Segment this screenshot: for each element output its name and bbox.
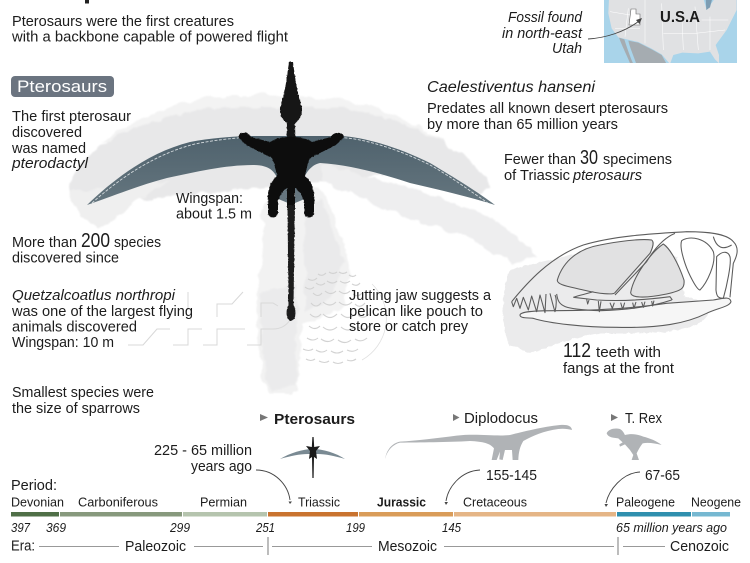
text: fewer than 30 specimens bbox=[504, 147, 672, 184]
lower jaw bbox=[520, 298, 731, 327]
text: fewer than 30 specimens: Fewer than bbox=[504, 152, 576, 168]
Mexico mainland bbox=[628, 41, 667, 65]
period names bbox=[11, 494, 741, 510]
text: teeth bbox=[563, 340, 674, 377]
text: wingspan: about 1.5 m bbox=[176, 206, 252, 222]
rear skull bones bbox=[615, 233, 732, 298]
torso and arms bbox=[238, 133, 344, 218]
period names: Neogene bbox=[691, 494, 741, 510]
text: 200 species: discovered since bbox=[12, 250, 119, 266]
text: Quetzalcoatlus: Wingspan: 10 m bbox=[12, 335, 114, 351]
text: smallest species: Smallest species were bbox=[12, 385, 154, 401]
timeline dates: 397 bbox=[11, 520, 31, 535]
arrow: T. rex to Cretaceous bbox=[604, 472, 640, 507]
skull outline bbox=[512, 232, 737, 302]
period names: Triassic bbox=[298, 494, 340, 510]
text: 200 species bbox=[12, 230, 161, 266]
era row: Mesozoic bbox=[378, 539, 437, 555]
timeline heading: Diplodocus: Diplodocus bbox=[464, 411, 538, 427]
text: wingspan bbox=[176, 191, 252, 222]
timeline heading: Pterosaurs: Pterosaurs bbox=[274, 411, 355, 428]
timeline bar bbox=[11, 512, 730, 516]
text: fossil location: Fossil found bbox=[508, 10, 583, 26]
era row: Cenozoic bbox=[670, 539, 729, 555]
text: 200 species: More than bbox=[12, 235, 77, 251]
text: fewer than 30 specimens: specimens bbox=[603, 152, 672, 168]
subtitle: with a backbone capable of powered flight bbox=[11, 30, 288, 46]
period names: Cretaceous bbox=[463, 494, 527, 510]
period names: Permian bbox=[200, 494, 247, 510]
skull drawing bbox=[512, 232, 737, 327]
text: fewer than 30 specimens: of Triassic bbox=[504, 168, 570, 184]
timeline dates: 145 bbox=[442, 520, 462, 535]
label: 155-145: 155-145 bbox=[486, 468, 537, 484]
text: jutting jaw: pelican like pouch to bbox=[349, 304, 483, 320]
timeline dates: 369 bbox=[46, 520, 66, 535]
tail bbox=[287, 205, 295, 320]
text: first pterosaur: discovered bbox=[12, 125, 82, 141]
text: Quetzalcoatlus bbox=[11, 288, 193, 351]
era row bbox=[11, 537, 729, 555]
timeline dates bbox=[11, 520, 727, 535]
text: teeth: fangs at the front bbox=[563, 361, 674, 377]
text: smallest species: the size of sparrows bbox=[12, 401, 140, 417]
timeline dates: 199 bbox=[346, 520, 365, 535]
text: teeth: 112 bbox=[563, 340, 591, 362]
label: 225-65 million years ago: 225 - 65 million bbox=[154, 443, 252, 459]
pterosaur body group bbox=[238, 62, 344, 320]
text: smallest species bbox=[12, 385, 154, 417]
text: Quetzalcoatlus: animals discovered bbox=[12, 320, 137, 336]
Utah bbox=[629, 9, 640, 25]
text: Caelestiventus hanseni: Predates all known desert pterosaurs bbox=[427, 101, 668, 117]
icon: diplodocus silhouette bbox=[385, 425, 572, 460]
era row: Era: bbox=[11, 538, 35, 554]
period names: Jurassic bbox=[377, 494, 426, 510]
rear opening bbox=[681, 238, 714, 290]
leg membrane bbox=[271, 178, 312, 203]
text: 200 species: species bbox=[114, 235, 161, 251]
brush shadow behind wings bbox=[67, 95, 537, 265]
subtitle: Pterosaurs were the first creatures bbox=[12, 14, 234, 30]
United States land bbox=[608, 0, 737, 64]
state borders bbox=[610, 0, 728, 50]
label: Period: Period: bbox=[11, 478, 57, 494]
arrow: diplodocus to Jurassic bbox=[444, 470, 480, 505]
clipped title fragment bbox=[85, 0, 89, 4]
text: jutting jaw: Jutting jaw suggests a bbox=[349, 288, 492, 304]
wings bbox=[87, 136, 495, 205]
text: jutting jaw bbox=[349, 288, 492, 335]
text: Quetzalcoatlus: Quetzalcoatlus northropi bbox=[12, 288, 176, 304]
text: Quetzalcoatlus: was one of the largest flying bbox=[11, 304, 193, 320]
text: fewer than 30 specimens: pterosaurs bbox=[572, 168, 642, 184]
locator map bbox=[604, 0, 737, 65]
text: fossil location: in north-east bbox=[502, 26, 583, 42]
timeline dates: 251 bbox=[255, 520, 275, 535]
label: 225-65 million years ago bbox=[154, 443, 252, 475]
text: Caelestiventus hanseni bbox=[427, 79, 668, 133]
timeline heading: T. Rex bbox=[611, 411, 663, 427]
text: fossil location: Utah bbox=[552, 41, 582, 57]
icon: T. rex silhouette bbox=[607, 429, 662, 460]
upper jaw line bbox=[557, 292, 672, 311]
period names: Paleogene bbox=[616, 494, 675, 510]
period names: Devonian bbox=[11, 494, 64, 510]
Baja California bbox=[619, 38, 633, 64]
text: teeth: teeth with bbox=[596, 345, 661, 361]
text: first pterosaur: was named bbox=[11, 141, 86, 157]
timeline dates: 299 bbox=[169, 520, 190, 535]
timeline dates: 65 million years ago bbox=[616, 520, 727, 535]
dimpled sphere bbox=[303, 272, 386, 364]
eye socket bbox=[631, 244, 684, 297]
badge: Pterosaurs: Pterosaurs bbox=[17, 77, 107, 96]
text: first pterosaur bbox=[11, 109, 131, 172]
text: Caelestiventus hanseni: by more than 65 million years bbox=[427, 117, 618, 133]
timeline heading: T. Rex: T. Rex bbox=[625, 411, 663, 427]
arrow: pterosaurs to Triassic bbox=[256, 470, 292, 504]
Great Lakes bbox=[706, 0, 712, 10]
label: 67-65: 67-65 bbox=[645, 468, 680, 484]
main pterosaur illustration bbox=[87, 62, 495, 320]
text: jutting jaw: store or catch prey bbox=[349, 319, 469, 335]
USA label: U.S.A bbox=[660, 9, 700, 26]
text: Caelestiventus hanseni: Caelestiventus hanseni bbox=[427, 79, 596, 96]
era row: Paleozoic bbox=[125, 539, 186, 555]
watermark lines bbox=[128, 292, 290, 345]
text: 200 species: 200 bbox=[81, 230, 110, 252]
period names: Carboniferous bbox=[78, 494, 158, 510]
subtitle bbox=[11, 14, 288, 46]
text: wingspan: Wingspan: bbox=[176, 191, 243, 207]
head crest and neck bbox=[280, 62, 302, 142]
icon: small pterosaur bbox=[280, 437, 345, 478]
antorbital opening bbox=[557, 240, 653, 294]
skull background wash bbox=[503, 248, 710, 353]
brush shadow below body bbox=[257, 187, 350, 393]
text: first pterosaur: pterodactyl bbox=[11, 156, 89, 172]
text: fossil location bbox=[502, 10, 583, 57]
arrow: to Utah bbox=[588, 18, 642, 39]
teeth bbox=[512, 293, 654, 313]
text: first pterosaur: The first pterosaur bbox=[12, 109, 131, 125]
label: 225-65 million years ago: years ago bbox=[191, 459, 252, 475]
text: fewer than 30 specimens: 30 bbox=[580, 147, 598, 169]
